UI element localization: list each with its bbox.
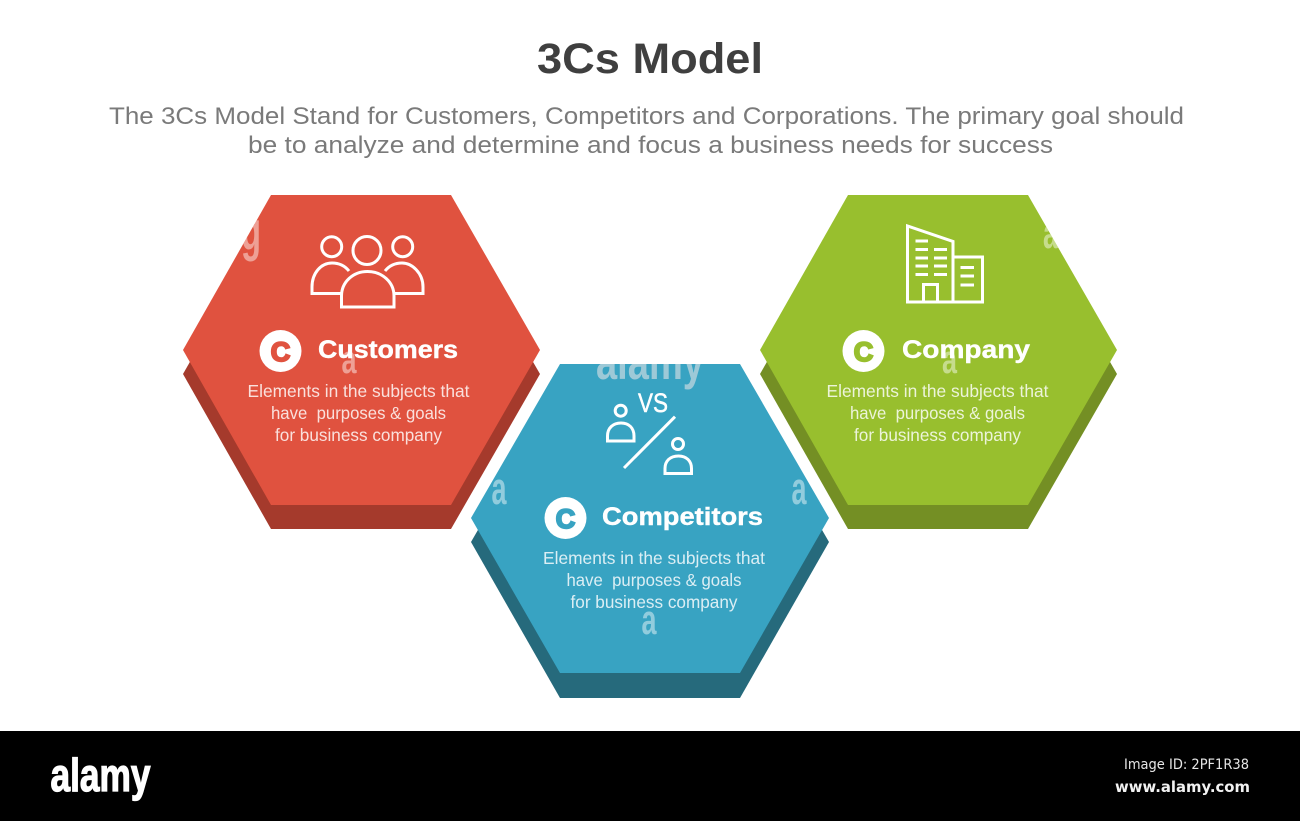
- panel: customers hexagon: [183, 195, 540, 529]
- watermark fragment: customers top: g: [241, 199, 261, 262]
- image id: Image ID: 2PF1R38: [1124, 757, 1249, 773]
- icon: C badge customers: [260, 330, 302, 372]
- white separator outline: [471, 364, 829, 698]
- description: customers: for business company: [275, 425, 442, 445]
- watermark fragments: competitors letters: [492, 463, 807, 643]
- icon: C badge company: [842, 330, 884, 372]
- heading: competitors: Competitors: [602, 503, 763, 531]
- watermark fragments: competitors letters: a: [792, 463, 807, 514]
- description: competitors: have purposes & goals: [566, 570, 742, 590]
- watermark fragments: competitors letters: a: [642, 596, 657, 643]
- hexagon shadow: competitors: [471, 388, 829, 698]
- hexagon shadow: company: [760, 220, 1117, 529]
- icon: group of people: [312, 236, 423, 307]
- watermark fragments: competitors letters: a: [492, 463, 507, 514]
- footer logo: alamy: [50, 749, 151, 801]
- subtitle text block: [109, 103, 1184, 159]
- description: company: have purposes & goals: [850, 403, 1025, 423]
- watermark fragment: company top: a: [1043, 209, 1058, 258]
- description: competitors: [543, 548, 765, 612]
- description: customers: [248, 381, 470, 445]
- watermark fragment: customers middle: a: [342, 338, 357, 382]
- icon: office buildings: [908, 226, 982, 302]
- icon label: VS: VS: [638, 388, 668, 418]
- description: competitors: Elements in the subjects that: [543, 548, 765, 568]
- panel: competitors hexagon: [471, 334, 829, 698]
- title: 3Cs Model: [537, 35, 763, 83]
- hexagon face: customers: [183, 195, 540, 505]
- heading: customers: Customers: [318, 336, 458, 364]
- description: company: [826, 381, 1049, 445]
- website: www.alamy.com: [1115, 778, 1250, 796]
- description: customers: Elements in the subjects that: [248, 381, 470, 401]
- hexagon shadow: customers: [183, 220, 540, 529]
- description: competitors: for business company: [570, 592, 738, 612]
- description: company: for business company: [854, 425, 1021, 445]
- heading: company: Company: [902, 336, 1030, 364]
- icon: C badge competitors: [544, 497, 586, 539]
- icon: C badge competitors: C: [556, 504, 575, 534]
- icon: C badge company: C: [854, 337, 873, 367]
- watermark fragment: competitors top word: alamy: [596, 334, 704, 390]
- footer bar: [0, 731, 1300, 821]
- subtitle text block: be to analyze and determine and focus a business needs for success: [248, 132, 1053, 159]
- subtitle text block: The 3Cs Model Stand for Customers, Competitors and Corporations. The primary goal should: [109, 103, 1184, 130]
- hexagon face: competitors: [471, 364, 829, 673]
- description: company: Elements in the subjects that: [826, 381, 1049, 401]
- watermark fragment: company middle: a: [942, 338, 958, 382]
- hexagon face: company: [760, 195, 1117, 505]
- description: customers: have purposes & goals: [271, 403, 446, 423]
- icon: C badge customers: C: [271, 337, 290, 367]
- panel: company hexagon: [760, 195, 1117, 529]
- icon: person versus person: [608, 405, 692, 474]
- footer background: [0, 731, 1300, 821]
